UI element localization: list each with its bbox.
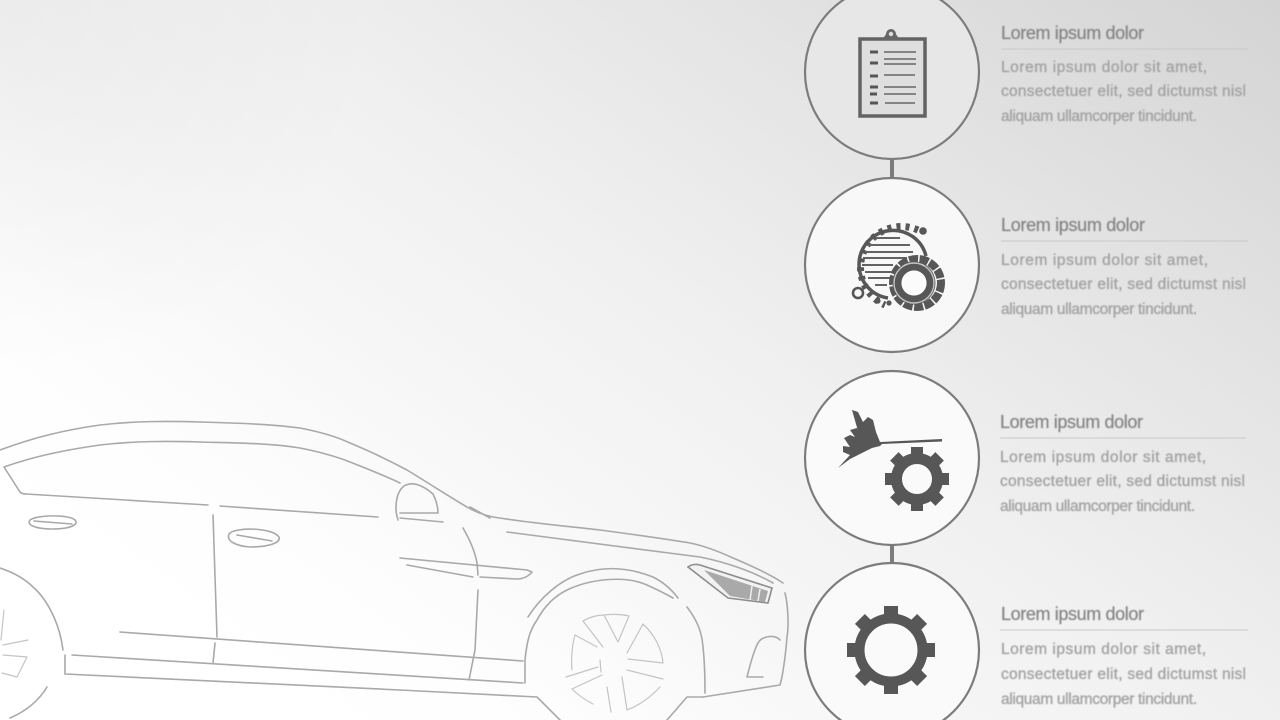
rear wheel arch — [0, 568, 63, 718]
side window — [4, 441, 400, 517]
headlight — [688, 564, 772, 603]
door seams — [213, 515, 478, 680]
heading 4: Lorem ipsum dolor — [1001, 604, 1144, 624]
character lines — [400, 532, 773, 583]
body 2: Lorem ipsum dolor sit amet, — [1001, 252, 1208, 269]
body 2: consectetuer elit, sed dictumst nisl — [1001, 276, 1246, 293]
step 4 — [805, 563, 1248, 720]
icon: feather brush — [838, 410, 942, 468]
body 1: Lorem ipsum dolor sit amet, — [1001, 59, 1207, 76]
circle 2 — [805, 178, 979, 352]
car roof and hood outline — [0, 421, 783, 583]
heading 3: Lorem ipsum dolor — [1000, 412, 1143, 432]
body 1: aliquam ullamcorper tincidunt. — [1001, 108, 1197, 125]
front door handle — [228, 529, 279, 547]
icon: gear small — [885, 447, 949, 511]
fog lamp — [747, 636, 780, 677]
windshield base — [470, 507, 490, 518]
body 4 — [1001, 641, 1246, 708]
front wheel arch — [525, 569, 705, 720]
car line drawing — [0, 421, 788, 720]
side mirror — [396, 484, 443, 522]
body 2: aliquam ullamcorper tincidunt. — [1001, 301, 1197, 318]
icon: gear large — [847, 606, 935, 694]
circle 3 — [805, 371, 979, 545]
heading 2: Lorem ipsum dolor — [1001, 215, 1145, 235]
icon: clipboard — [860, 29, 925, 116]
rear door handle — [29, 516, 76, 529]
front bumper — [703, 593, 788, 697]
body 3: Lorem ipsum dolor sit amet, — [1000, 449, 1206, 466]
front wheel spokes — [566, 614, 663, 712]
body 3: consectetuer elit, sed dictumst nisl — [1000, 473, 1245, 490]
body 4: aliquam ullamcorper tincidunt. — [1001, 691, 1197, 708]
body 4: Lorem ipsum dolor sit amet, — [1001, 641, 1206, 658]
body 3 — [1000, 449, 1245, 515]
body 2 — [1001, 252, 1246, 318]
step 1 — [805, 0, 1248, 159]
text block 1 — [1001, 23, 1248, 125]
icon: cog with leafy ring — [853, 227, 941, 307]
step 2 — [805, 178, 1248, 352]
text block 4 — [1000, 604, 1248, 708]
rear wheel spokes — [1, 610, 28, 677]
connector: step 1 to step 2 — [890, 159, 894, 180]
connector: step 3 to step 4 — [890, 544, 894, 564]
circle 4 — [805, 563, 979, 720]
body 3: aliquam ullamcorper tincidunt. — [1000, 498, 1195, 515]
sill lines — [65, 632, 560, 720]
text block 3 — [1000, 412, 1246, 515]
heading 1: Lorem ipsum dolor — [1001, 23, 1144, 43]
body 4: consectetuer elit, sed dictumst nisl — [1001, 666, 1246, 683]
text block 2 — [1001, 215, 1248, 318]
step 3 — [805, 371, 1246, 545]
body 1: consectetuer elit, sed dictumst nisl — [1001, 83, 1246, 100]
body 1 — [1001, 59, 1246, 125]
circle 1 — [805, 0, 979, 159]
